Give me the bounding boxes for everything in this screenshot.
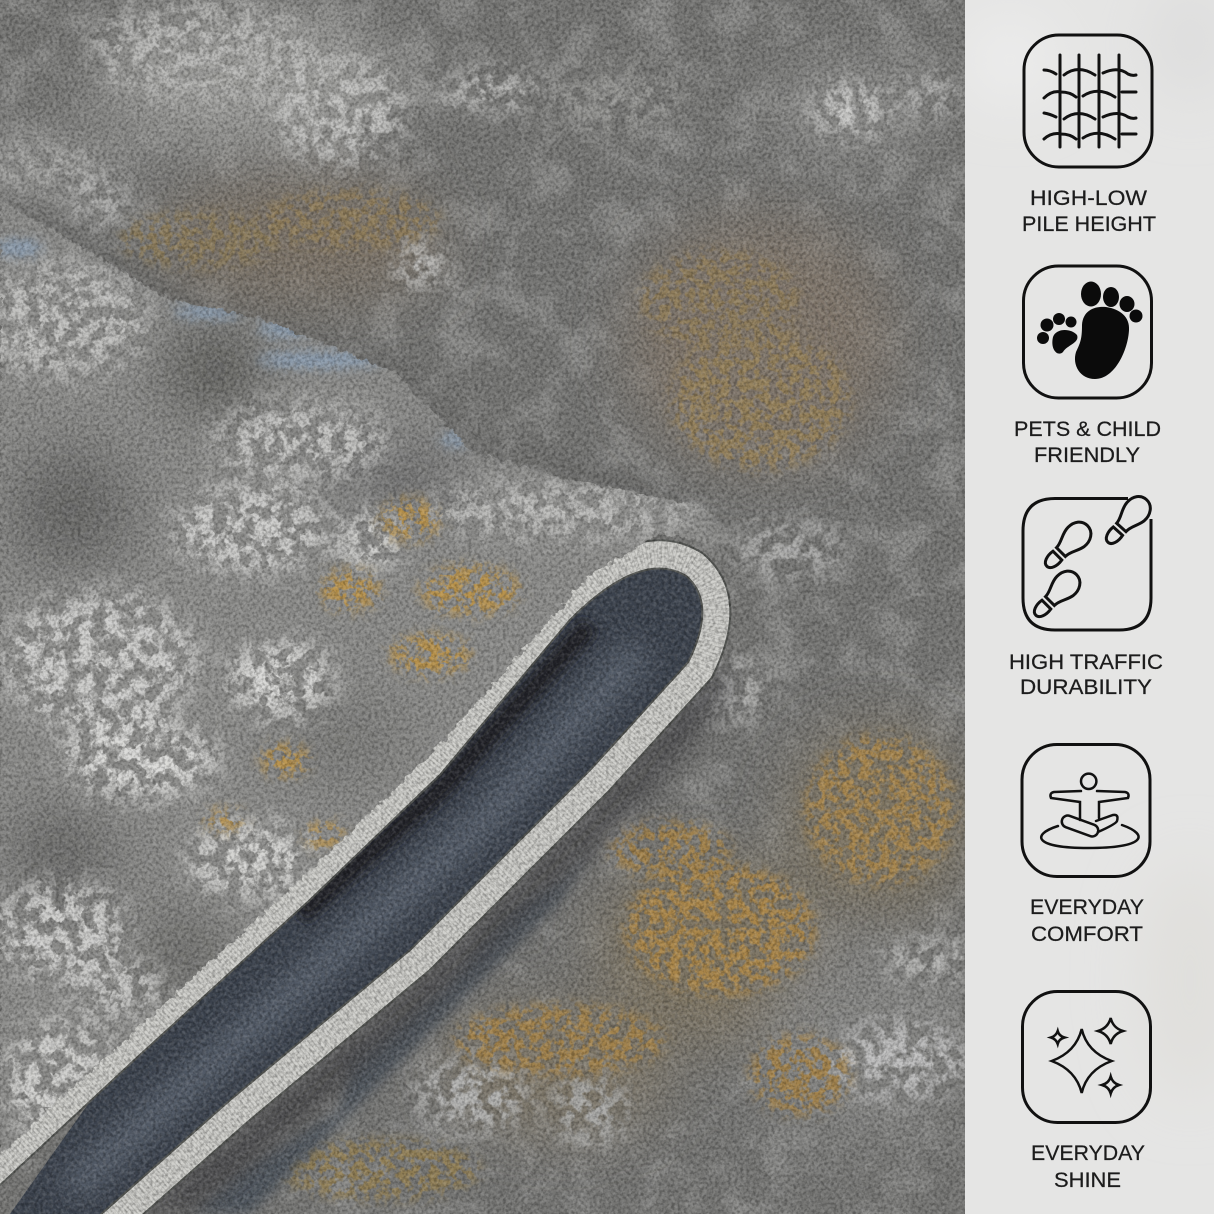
label: EVERYDAY [1030,895,1144,919]
rug underside pile shadow [0,200,730,1214]
icon: meditating figure [1022,744,1150,876]
feature: everyday comfort [1022,744,1150,946]
label [1009,650,1163,699]
label [1022,186,1156,236]
label: COMFORT [1031,922,1143,946]
feature: pets and child friendly [1014,266,1161,467]
label: FRIENDLY [1034,443,1140,467]
label: SHINE [1054,1168,1121,1192]
sidebar background panel [965,61,1010,1130]
label: PILE HEIGHT [1022,212,1156,236]
feature: everyday shine [1022,992,1150,1192]
icon: sparkles [1022,992,1150,1122]
rug fold: binding edge [0,554,716,1214]
icon: footprints [1023,491,1156,630]
label [1031,1141,1145,1192]
label: PETS & CHILD [1014,417,1161,441]
feature: high-low pile height [1022,35,1156,236]
label: DURABILITY [1020,675,1152,699]
pile grain texture [0,0,965,1214]
rug fold: top pile surface [0,190,740,1190]
label: EVERYDAY [1031,1141,1145,1165]
label [1014,417,1161,467]
label [1030,895,1144,946]
label: HIGH-LOW [1030,186,1148,210]
feature: high traffic durability [1009,491,1163,699]
label: HIGH TRAFFIC [1009,650,1163,674]
icon: pile fibres [1024,35,1152,167]
icon: paw and foot [1024,266,1152,398]
rug fold: backing [10,554,716,1214]
